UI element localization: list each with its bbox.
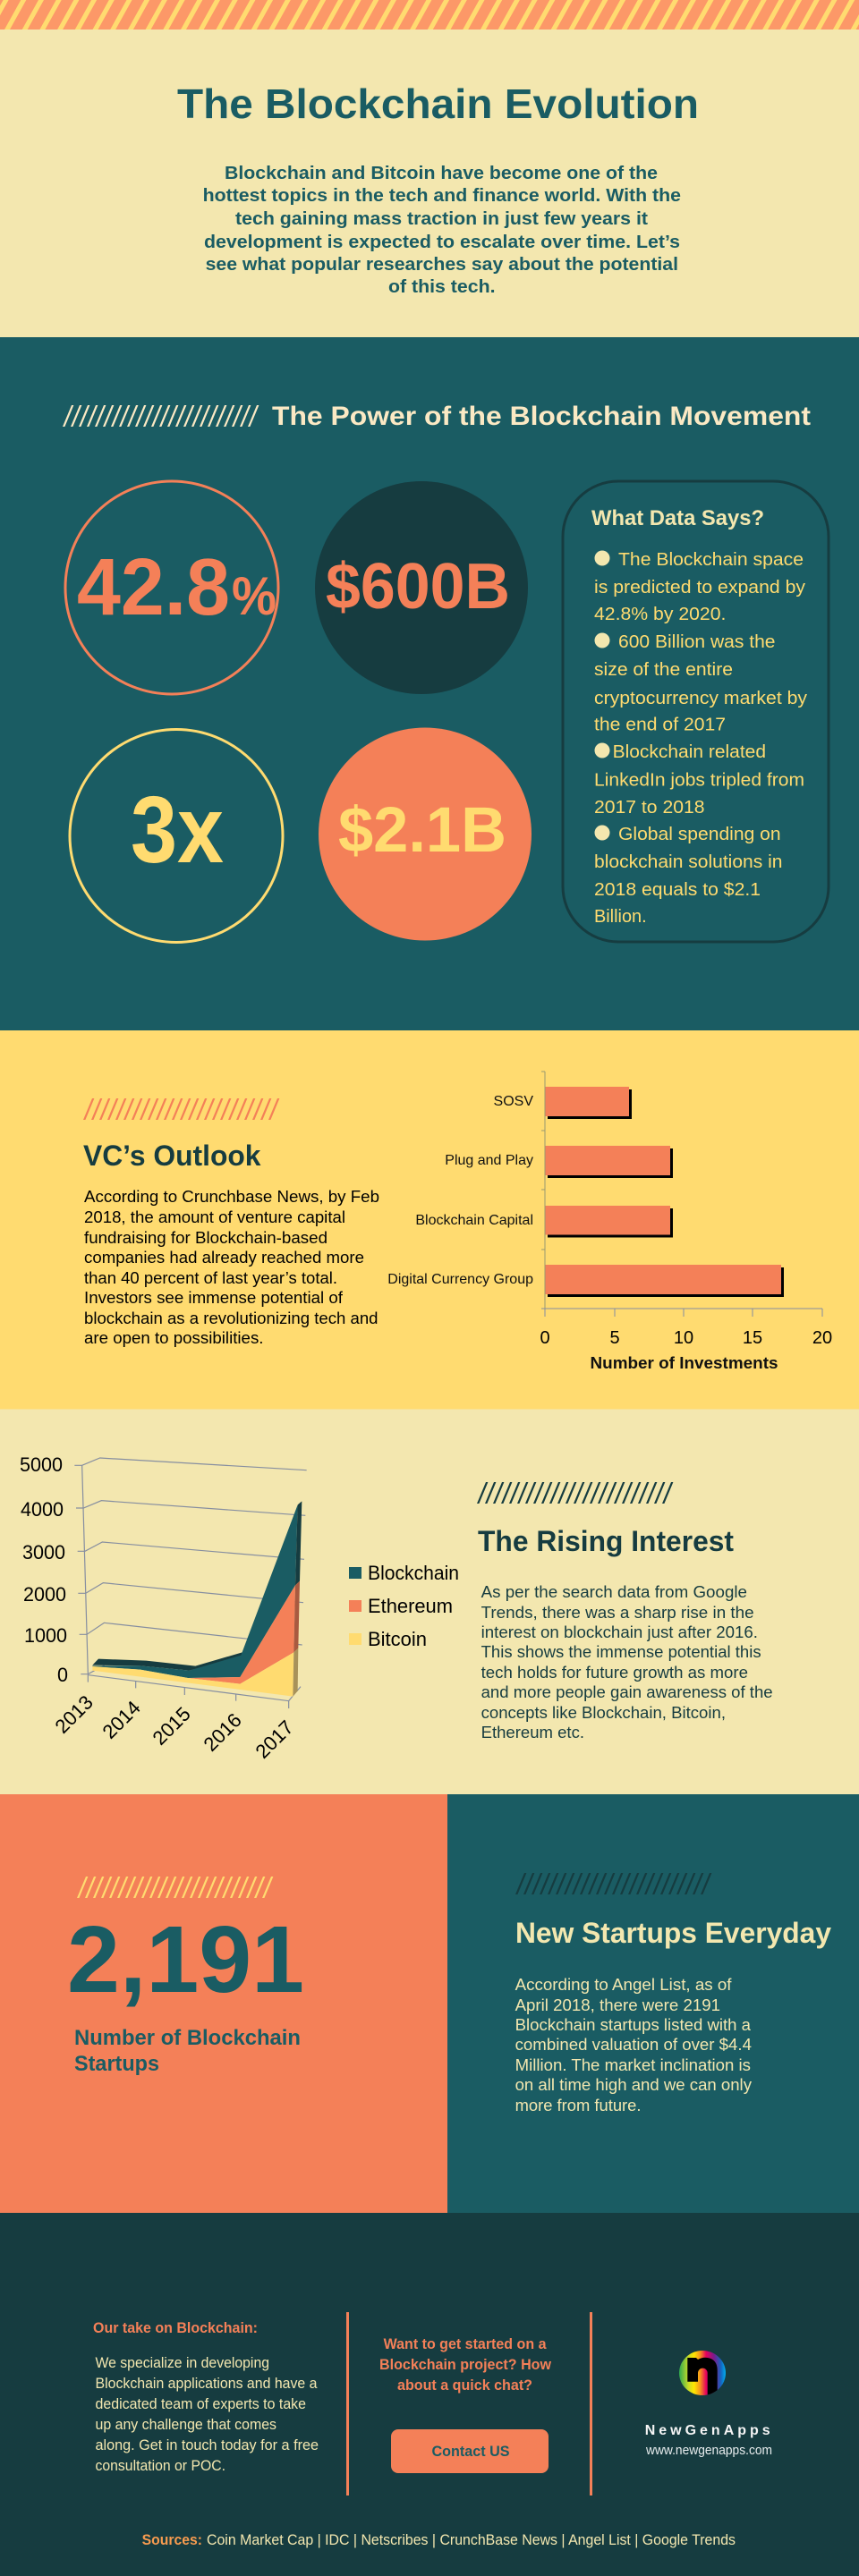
3D area chart <box>20 1453 459 1763</box>
category labels: Blockchain Capital <box>415 1213 533 1228</box>
paragraph: Trends, there was a sharp rise in the <box>481 1604 754 1622</box>
number caption: Number of Blockchain <box>74 2026 301 2050</box>
our take paragraph: Blockchain applications and have a <box>95 2375 318 2392</box>
panel: top striped banner <box>0 0 859 30</box>
chart x axis labels: 2013 <box>51 1691 98 1738</box>
stat circle: 42.8% <box>65 481 278 694</box>
chart x axis labels: 2014 <box>98 1697 145 1743</box>
bullet text: 42.8% by 2020. <box>594 605 726 624</box>
our take paragraph <box>95 2354 319 2474</box>
bullet text: 2017 to 2018 <box>594 798 705 818</box>
section heading: The Rising Interest <box>478 1525 734 1557</box>
our take paragraph: up any challenge that comes <box>95 2416 276 2433</box>
hatch decoration <box>81 1877 268 1898</box>
chart areas <box>92 1501 302 1697</box>
stat circle: $600B: $600B <box>326 551 510 623</box>
chart legend <box>349 1562 459 1650</box>
stat circle: 3x: 3x <box>131 777 224 883</box>
paragraph: fundraising for Blockchain-based <box>84 1229 327 1247</box>
stat circle: $600B <box>315 481 528 694</box>
bullet text: cryptocurrency market by <box>594 689 807 708</box>
paragraph: As per the search data from Google <box>481 1583 747 1601</box>
chart grid and axes <box>74 1458 307 1708</box>
hatch decoration <box>67 405 254 427</box>
chart x axis labels: 2016 <box>200 1709 246 1756</box>
icon: NewGenApps logo <box>679 2351 726 2397</box>
paragraph: than 40 percent of last year’s total. <box>84 1269 337 1287</box>
hatch decoration <box>88 1098 275 1120</box>
bullet text: 600 Billion was the <box>618 632 775 652</box>
paragraph <box>84 1188 379 1347</box>
axis values: 10 <box>674 1328 693 1348</box>
number caption: Startups <box>74 2052 159 2076</box>
call to action text: about a quick chat? <box>397 2377 532 2394</box>
bullet text: is predicted to expand by <box>594 578 805 597</box>
chart legend: Bitcoin <box>368 1628 427 1650</box>
panel: new startups everyday <box>447 1794 859 2213</box>
bullet text: blockchain solutions in <box>594 852 782 872</box>
intro paragraph: hottest topics in the tech and finance world. With the <box>203 186 681 206</box>
chart y axis labels: 0 <box>57 1664 68 1686</box>
section heading: The Power of the Blockchain Movement <box>272 402 811 431</box>
hatch decoration <box>481 1482 668 1504</box>
chart x axis labels <box>51 1691 298 1763</box>
paragraph: companies had already reached more <box>84 1249 364 1267</box>
panel: the rising interest <box>0 1410 859 1794</box>
intro paragraph: of this tech. <box>388 277 496 297</box>
our take paragraph: dedicated team of experts to take <box>95 2395 306 2412</box>
contact button <box>391 2429 549 2473</box>
bullet text: Billion. <box>594 907 647 927</box>
paragraph: tech holds for future growth as more <box>481 1664 748 1682</box>
sources line: Coin Market Cap | IDC | Netscribes | CrunchBase News | Angel List | Google Trends <box>207 2531 736 2548</box>
bullet text: The Blockchain space <box>618 550 804 570</box>
chart x axis labels: 2017 <box>251 1716 298 1763</box>
number caption <box>74 2026 301 2076</box>
panel: number of startups <box>0 1794 447 2213</box>
paragraph: According to Angel List, as of <box>515 1976 733 1994</box>
axis values: 0 <box>540 1328 550 1348</box>
panel: VC's outlook <box>0 1030 859 1410</box>
hatch decoration <box>520 1873 707 1894</box>
axis values <box>540 1328 832 1348</box>
chart y axis labels: 3000 <box>22 1541 65 1563</box>
category labels: Plug and Play <box>445 1153 533 1168</box>
bullet text <box>594 550 807 927</box>
bar: Digital Currency Group <box>545 1265 784 1297</box>
axis values: 20 <box>812 1328 832 1348</box>
sources line: Sources: <box>142 2531 202 2548</box>
intro paragraph <box>203 164 681 297</box>
chart y axis labels: 1000 <box>24 1624 67 1647</box>
paragraph <box>481 1583 773 1741</box>
bar chart: number of investments <box>387 1072 832 1372</box>
our take paragraph: along. Get in touch today for a free <box>95 2436 319 2453</box>
axis values: 15 <box>743 1328 762 1348</box>
category labels: Digital Currency Group <box>387 1272 533 1287</box>
chart y axis labels: 5000 <box>20 1453 63 1476</box>
paragraph: blockchain as a revolutionizing tech and <box>84 1309 378 1327</box>
chart legend: Ethereum <box>368 1595 453 1617</box>
bullet text: Global spending on <box>618 825 781 844</box>
paragraph: combined valuation of over $4.4 <box>515 2036 752 2054</box>
panel: what data says <box>563 481 829 942</box>
call to action text: Want to get started on a <box>384 2335 547 2352</box>
paragraph: 2018, the amount of venture capital <box>84 1208 345 1226</box>
our take paragraph: consultation or POC. <box>95 2457 225 2474</box>
panel heading: What Data Says? <box>591 506 764 530</box>
bar: Blockchain Capital <box>545 1206 673 1238</box>
bullet text: the end of 2017 <box>594 716 726 735</box>
paragraph: concepts like Blockchain, Bitcoin, <box>481 1704 726 1722</box>
bullet text: Blockchain related <box>613 742 766 762</box>
brand name: NewGenApps <box>645 2423 770 2438</box>
call to action text <box>379 2335 552 2394</box>
paragraph: are open to possibilities. <box>84 1329 263 1347</box>
paragraph: Ethereum etc. <box>481 1724 584 1741</box>
chart y axis labels: 4000 <box>21 1498 64 1521</box>
paragraph <box>515 1976 752 2114</box>
paragraph: interest on blockchain just after 2016. <box>481 1623 758 1641</box>
section heading: VC’s Outlook <box>83 1140 261 1172</box>
bar: Plug and Play <box>545 1146 673 1178</box>
paragraph: Blockchain startups listed with a <box>515 2016 752 2034</box>
chart x axis labels: 2015 <box>149 1703 195 1750</box>
contact button: Contact US <box>431 2443 510 2460</box>
website: www.newgenapps.com <box>645 2443 772 2458</box>
paragraph: on all time high and we can only <box>515 2076 752 2094</box>
intro paragraph: see what popular researches say about the potential <box>206 255 678 275</box>
panel: header intro <box>0 30 859 337</box>
stat circle: 3x <box>70 730 283 943</box>
chart y axis labels <box>20 1453 68 1686</box>
our take heading: Our take on Blockchain: <box>93 2319 258 2336</box>
bullet text: size of the entire <box>594 660 733 680</box>
intro paragraph: Blockchain and Bitcoin have become one of the <box>225 164 658 183</box>
stat circle: 42.8%: 42.8 <box>77 543 230 632</box>
stat circle: $2.1B: $2.1B <box>338 795 506 866</box>
chart legend: Blockchain <box>368 1562 459 1584</box>
paragraph: According to Crunchbase News, by Feb <box>84 1188 379 1206</box>
axis values: 5 <box>609 1328 620 1348</box>
our take paragraph: We specialize in developing <box>95 2354 269 2371</box>
intro paragraph: tech gaining mass traction in just few years it <box>235 209 648 229</box>
big number: 2,191 <box>67 1907 304 2012</box>
paragraph: Investors see immense potential of <box>84 1289 344 1307</box>
title: The Blockchain Evolution <box>177 80 699 127</box>
bar: SOSV <box>545 1087 632 1119</box>
bullet text: 2018 equals to $2.1 <box>594 880 761 900</box>
chart y axis labels: 2000 <box>23 1583 66 1606</box>
category labels <box>387 1094 533 1287</box>
bullet text: LinkedIn jobs tripled from <box>594 771 804 791</box>
our take block <box>93 2319 319 2474</box>
paragraph: Million. The market inclination is <box>515 2056 751 2074</box>
paragraph: This shows the immense potential this <box>481 1643 761 1661</box>
bullet markers <box>594 551 610 841</box>
intro paragraph: development is expected to escalate over time. Let’s <box>204 233 680 252</box>
panel: footer <box>93 2312 771 2547</box>
call to action text: Blockchain project? How <box>379 2356 552 2373</box>
category labels: SOSV <box>494 1094 533 1109</box>
axis title: Number of Investments <box>591 1354 778 1372</box>
paragraph: more from future. <box>515 2097 641 2114</box>
panel: power of the blockchain movement <box>0 337 859 1030</box>
stat circle: $2.1B <box>319 728 532 941</box>
stat circle: 42.8%: % <box>232 566 276 626</box>
paragraph: and more people gain awareness of the <box>481 1683 773 1701</box>
section heading: New Startups Everyday <box>515 1917 831 1949</box>
paragraph: April 2018, there were 2191 <box>515 1996 720 2014</box>
